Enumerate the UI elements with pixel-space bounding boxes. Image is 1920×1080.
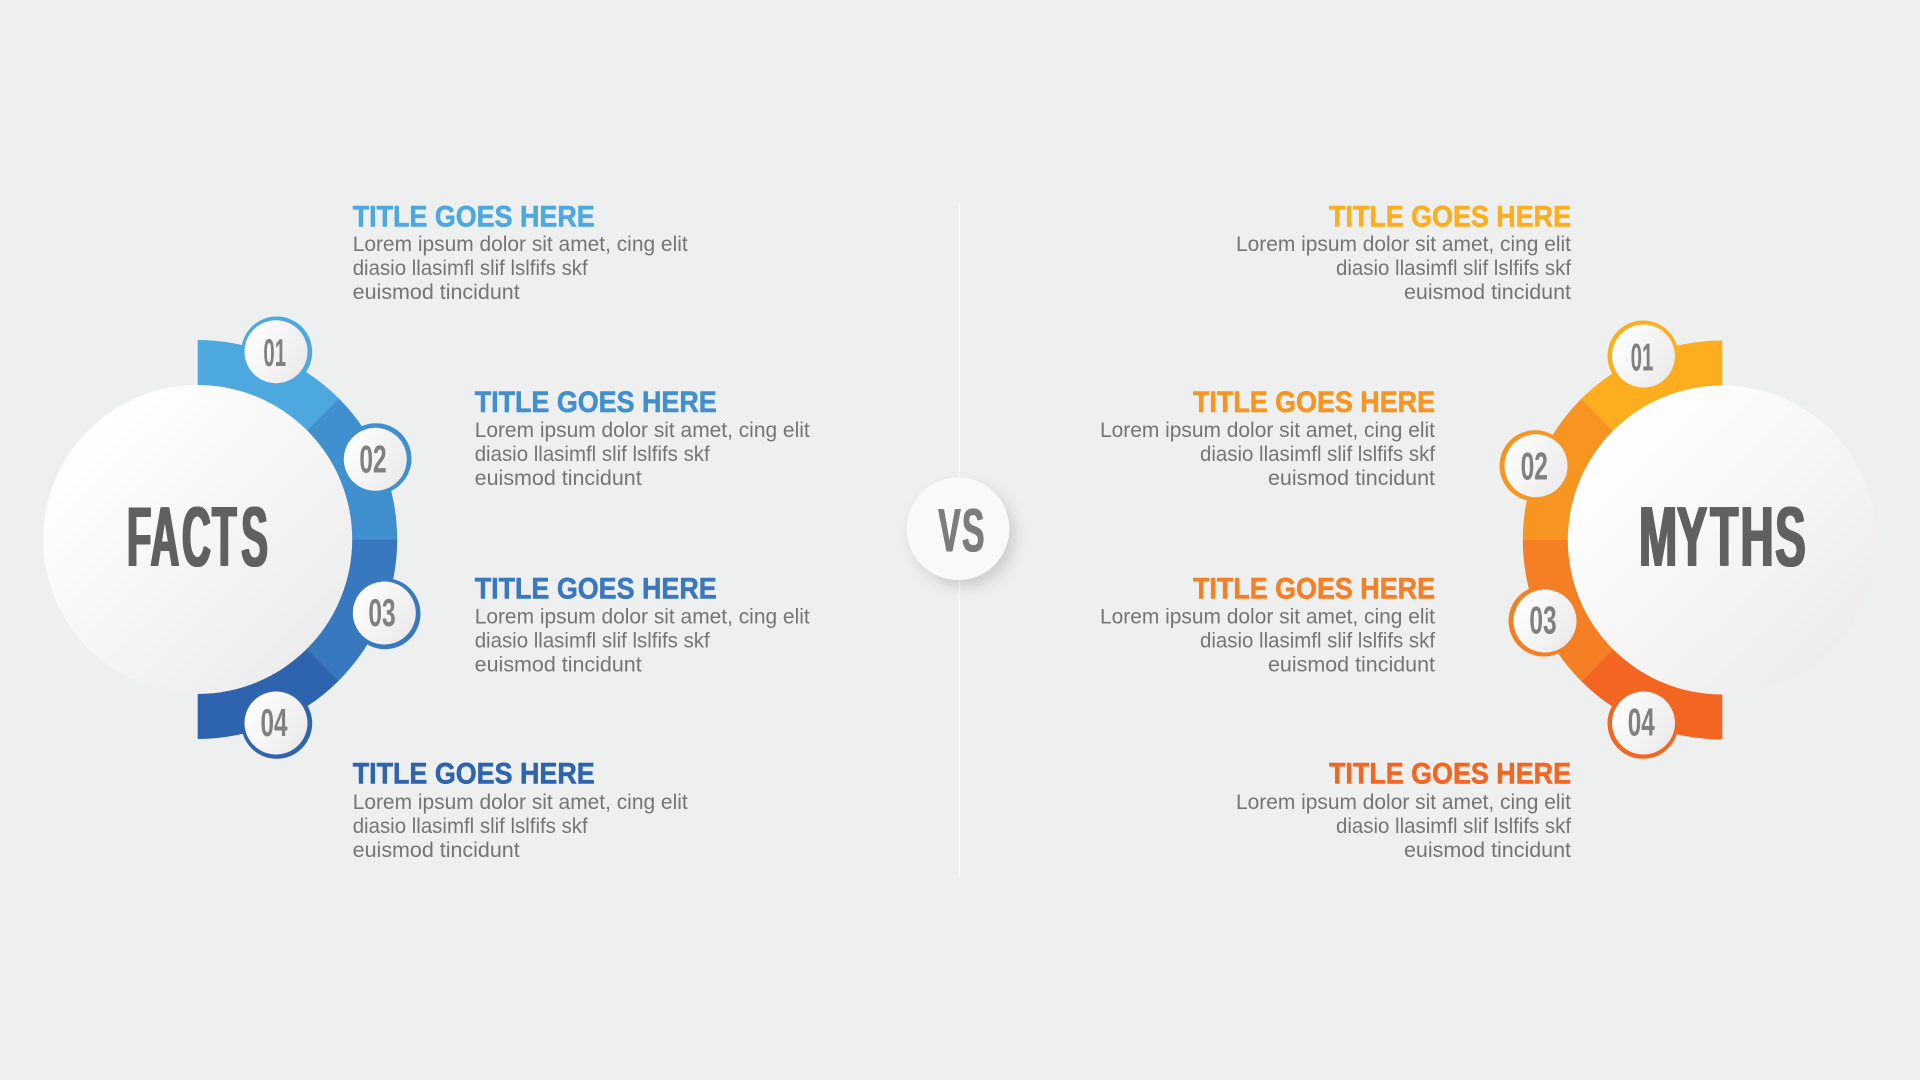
facts label: FACTS (127, 490, 268, 585)
text block: facts 1 (353, 201, 688, 304)
text block: myths 4: Lorem ipsum dolor sit amet, cing elit (1236, 791, 1571, 814)
text block: facts 4: diasio llasimfl slif lslfifs skf (353, 815, 588, 838)
text block: facts 3 (475, 572, 810, 676)
ring segment 2 (307, 398, 397, 540)
number badge 04 (1608, 688, 1678, 759)
panel: myths diagram (1500, 320, 1877, 759)
text block: myths 4: TITLE GOES HERE (1329, 758, 1571, 790)
number badge 04: 04 (260, 702, 288, 745)
number badge 01: 01 (1631, 337, 1653, 380)
text block: myths 3 (1100, 572, 1435, 676)
number badge 04: 04 (1628, 702, 1655, 745)
text block: facts 3: Lorem ipsum dolor sit amet, cing elit (475, 605, 810, 628)
number badge 01 (1608, 320, 1678, 392)
text block: facts 2: TITLE GOES HERE (475, 386, 717, 419)
text block: myths 1: euismod tincidunt (1404, 281, 1571, 304)
ring segment 2 (1523, 399, 1613, 540)
text block: myths 3: TITLE GOES HERE (1193, 572, 1435, 605)
text block: facts 3: TITLE GOES HERE (475, 572, 717, 605)
number badge 02 (1500, 430, 1570, 501)
text block: facts 3: euismod tincidunt (475, 653, 642, 676)
number badge 02 (340, 423, 412, 494)
text block: myths 2: TITLE GOES HERE (1193, 386, 1435, 419)
myths label: MYTHS (1639, 490, 1806, 585)
text block: facts 4: TITLE GOES HERE (353, 758, 595, 790)
ring segment 3 (307, 540, 397, 681)
myths main circle (1568, 386, 1877, 694)
ring segment 3 (1523, 540, 1613, 681)
text block: myths 4: euismod tincidunt (1404, 839, 1571, 862)
number badge 03 (1508, 586, 1580, 656)
text block: myths 2: euismod tincidunt (1268, 467, 1435, 490)
number badge 02: 02 (1521, 445, 1548, 488)
number badge 03: 03 (368, 592, 396, 635)
text block: myths 1: Lorem ipsum dolor sit amet, cing elit (1236, 233, 1571, 256)
text block: myths 2 (1100, 386, 1435, 490)
number badge 03 (350, 578, 420, 649)
ring segment 1 (1581, 340, 1722, 431)
text block: facts 2: diasio llasimfl slif lslfifs skf (475, 443, 710, 466)
text block: myths 3: Lorem ipsum dolor sit amet, cing elit (1100, 605, 1435, 628)
number badge 01: 01 (263, 332, 286, 375)
text block: facts 4 (353, 758, 688, 862)
VS badge: VS (938, 497, 984, 565)
text block: facts 4: euismod tincidunt (353, 839, 520, 862)
number badge 04 (241, 688, 312, 759)
text block: facts 1: TITLE GOES HERE (353, 201, 595, 234)
text block: myths 1 (1236, 201, 1571, 304)
text block: facts 2 (475, 386, 810, 490)
text block: myths 2: Lorem ipsum dolor sit amet, cing elit (1100, 419, 1435, 442)
text block: myths 3: euismod tincidunt (1268, 653, 1435, 676)
number badge 02: 02 (359, 439, 387, 482)
text block: facts 4: Lorem ipsum dolor sit amet, cing elit (353, 791, 688, 814)
text block: myths 4: diasio llasimfl slif lslfifs skf (1336, 815, 1571, 838)
text block: facts 2: Lorem ipsum dolor sit amet, cing elit (475, 419, 810, 442)
center divider line (958, 202, 960, 878)
number badge 03: 03 (1529, 599, 1557, 642)
number badge 01 (241, 316, 312, 388)
text block: facts 3: diasio llasimfl slif lslfifs skf (475, 629, 710, 652)
text block: myths 1: TITLE GOES HERE (1329, 201, 1571, 234)
ring segment 4 (198, 648, 339, 739)
text block: myths 3: diasio llasimfl slif lslfifs skf (1200, 629, 1435, 652)
text block: facts 1: Lorem ipsum dolor sit amet, cing elit (353, 233, 688, 256)
text block: facts 1: euismod tincidunt (353, 281, 520, 304)
text block: facts 2: euismod tincidunt (475, 467, 642, 490)
ring segment 4 (1581, 649, 1722, 740)
ring segment 1 (198, 340, 339, 431)
VS badge (907, 477, 1009, 580)
panel: facts diagram (43, 316, 420, 759)
text block: myths 2: diasio llasimfl slif lslfifs skf (1200, 443, 1435, 466)
text block: myths 1: diasio llasimfl slif lslfifs skf (1336, 257, 1571, 280)
text block: myths 4 (1236, 758, 1571, 862)
text block: facts 1: diasio llasimfl slif lslfifs skf (353, 257, 588, 280)
facts main circle (43, 385, 352, 694)
